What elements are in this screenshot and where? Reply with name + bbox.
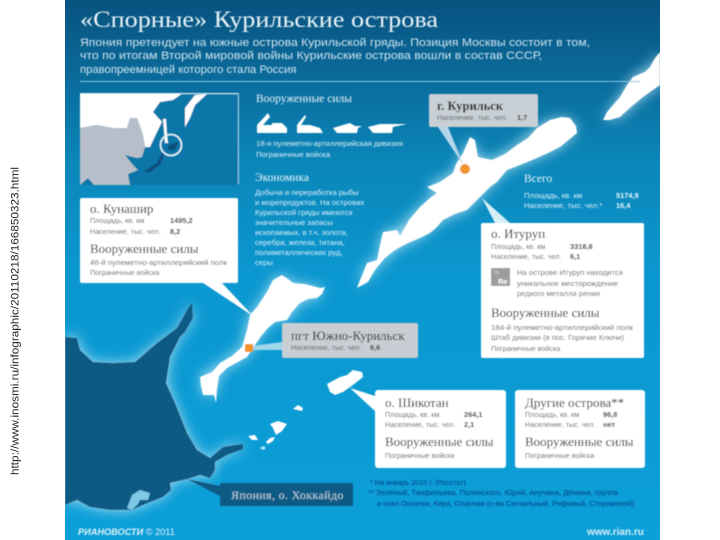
panel: economy: ископаемых, в т.ч. золота, (255, 228, 348, 237)
panel: total: 5174,9 (616, 191, 639, 200)
callout: Iturup: На острове Итуруп находится (517, 268, 623, 277)
callout: other islands (515, 390, 645, 468)
callout: Yuzhno-Kurilsk: 6,6 (370, 343, 380, 352)
panel: economy: Курильской гряды имеются (255, 208, 352, 217)
callout: other islands: нет (603, 420, 615, 429)
callout: Kurilsk: Население, тыс. чел. (437, 113, 507, 122)
callout: Shikotan: 264,1 (464, 410, 482, 419)
Kuril islands (200, 52, 660, 450)
source url, rotated: http://www.inosmi.ru/infographic/20110218/166850323.html (10, 167, 22, 475)
callout: Kunashir (80, 198, 253, 316)
callout: other islands: Площадь, кв. км (525, 410, 579, 419)
callout: other islands: 96,8 (603, 410, 617, 419)
callout: Japan, Hokkaido: Япония, о. Хоккайдо (231, 488, 344, 502)
Habomai islands (248, 405, 303, 450)
callout: Shikotan: Население, тыс. чел. (385, 420, 455, 429)
callout: Shikotan: Площадь, кв. км (385, 410, 439, 419)
panel: economy (255, 172, 364, 267)
callout: Iturup: 3318,8 (570, 242, 593, 251)
callout: Shikotan (350, 388, 506, 468)
footnotes (368, 478, 634, 508)
callout: other islands: Вооруженные силы (525, 434, 634, 449)
panel: total: Площадь, кв. км (524, 191, 582, 200)
callout: Yuzhno-Kurilsk: пгт Южно-Курильск (291, 328, 405, 343)
callout: Japan, Hokkaido (187, 479, 353, 506)
callout: Kurilsk: г. Курильск (437, 99, 504, 113)
callout: Iturup: уникальное месторождение (517, 279, 618, 288)
callout: Iturup: Пограничные войска (491, 344, 560, 353)
intro text: правопреемницей которого стала Россия (80, 64, 297, 76)
callout: Shikotan: о. Шикотан (385, 395, 449, 410)
callout: other islands: Пограничные войска (525, 451, 594, 460)
callout: other islands: Население, тыс. чел. (525, 420, 595, 429)
intro text: что по итогам Второй мировой войны Курильские острова вошли в состав СССР, (80, 50, 542, 62)
title: «Спорные» Курильские острова (80, 7, 439, 33)
callout: Iturup: Вооруженные силы (491, 305, 600, 320)
callout: Iturup: Штаб дивизии (в пос. Горячие Ключи) (491, 333, 624, 342)
callout: Shikotan: Вооруженные силы (385, 434, 494, 449)
Hokkaido, Japan (65, 303, 243, 510)
panel: total (524, 173, 639, 210)
footnotes: * На январь 2010 г. (Росстат) (370, 478, 466, 487)
panel: economy: значительные запасы (255, 218, 333, 227)
icons: weapons (257, 113, 407, 133)
locator circle (160, 134, 182, 156)
callout: Kunashir: Население, тыс. чел. (90, 227, 160, 236)
callout: Kunashir: 1495,2 (170, 216, 193, 225)
intro text: Япония претендует на южные острова Курильской гряды. Позиция Москвы состоит в том, (80, 37, 590, 49)
callout: Shikotan: Пограничные войска (385, 451, 454, 460)
callout: Iturup: редкого металла рения (517, 289, 600, 298)
footer: copyright: РИАНОВОСТИ © 2011 (78, 527, 175, 537)
callout: Iturup: 6,1 (570, 252, 580, 261)
callout: Kunashir: Площадь, кв. км (90, 216, 144, 225)
panel: economy: серы (255, 258, 273, 267)
Shikotan island (327, 370, 363, 395)
intro text (80, 37, 590, 76)
callout: Iturup: Население, тыс. чел. (491, 252, 561, 261)
callout: Yuzhno-Kurilsk: Население, тыс. чел. (291, 343, 361, 352)
callout: Shikotan: 2,1 (464, 420, 474, 429)
icon: rhenium: Re (498, 277, 508, 286)
callout: Iturup (481, 198, 644, 358)
panel: economy: серебра, железа, титана, (255, 238, 345, 247)
map halo glow (65, 52, 660, 510)
panel: armed forces (256, 93, 407, 159)
Iturup island (357, 117, 577, 288)
panel: armed forces: Вооруженные силы (256, 93, 352, 105)
callout: Kurilsk (429, 94, 538, 174)
icon: rhenium (491, 268, 510, 286)
callout: Kunashir: Пограничные войска (90, 268, 159, 277)
callout: Kunashir: Вооруженные силы (90, 241, 199, 256)
footnotes: и скал Осколки, Кира, Опасная (о-ва Сигнальный, Рифовый, Сторожевой) (377, 499, 634, 508)
callout: Kunashir: 46-й пулеметно-артиллерийский полк (90, 258, 228, 267)
footnotes: ** Зеленый, Танфильева, Полонского, Юрий, Анучина, Дёмина, группа (368, 488, 618, 497)
panel: economy: Добыча и переработка рыбы (255, 188, 359, 197)
panel: economy: и морепродуктов. На островах (255, 198, 364, 207)
panel: total: Население, тыс. чел.* (524, 201, 602, 210)
panel: economy: Экономика (255, 172, 309, 184)
callout: other islands: Другие острова** (525, 395, 624, 410)
icon: rhenium: 75 (494, 270, 500, 275)
Kunashir island (200, 275, 325, 403)
marker: Yuzhno-Kurilsk (245, 344, 253, 352)
panel: total: 16,4 (616, 201, 631, 210)
callout: Kunashir: о. Кунашир (90, 201, 153, 216)
callout: Yuzhno-Kurilsk (245, 323, 418, 358)
Urup island (603, 52, 660, 120)
callout: Kurilsk: 1,7 (517, 113, 527, 122)
callout: Iturup: 184-й пулеметно-артиллерийский полк (491, 323, 634, 332)
callout: Iturup: Площадь, кв. км (491, 242, 545, 251)
callout: Kunashir: 8,2 (170, 227, 180, 236)
inset locator map (80, 93, 238, 185)
footer: website: www.rian.ru (586, 527, 644, 538)
marker: Kurilsk (460, 164, 470, 174)
callout: Iturup: о. Итуруп (491, 226, 545, 241)
panel: armed forces: Пограничные войска (256, 150, 331, 159)
panel: total: Всего (524, 173, 552, 185)
panel: economy: полиметаллических руд, (255, 248, 342, 257)
panel: armed forces: 18-я пулеметно-артиллерийская дивизия (256, 139, 403, 148)
